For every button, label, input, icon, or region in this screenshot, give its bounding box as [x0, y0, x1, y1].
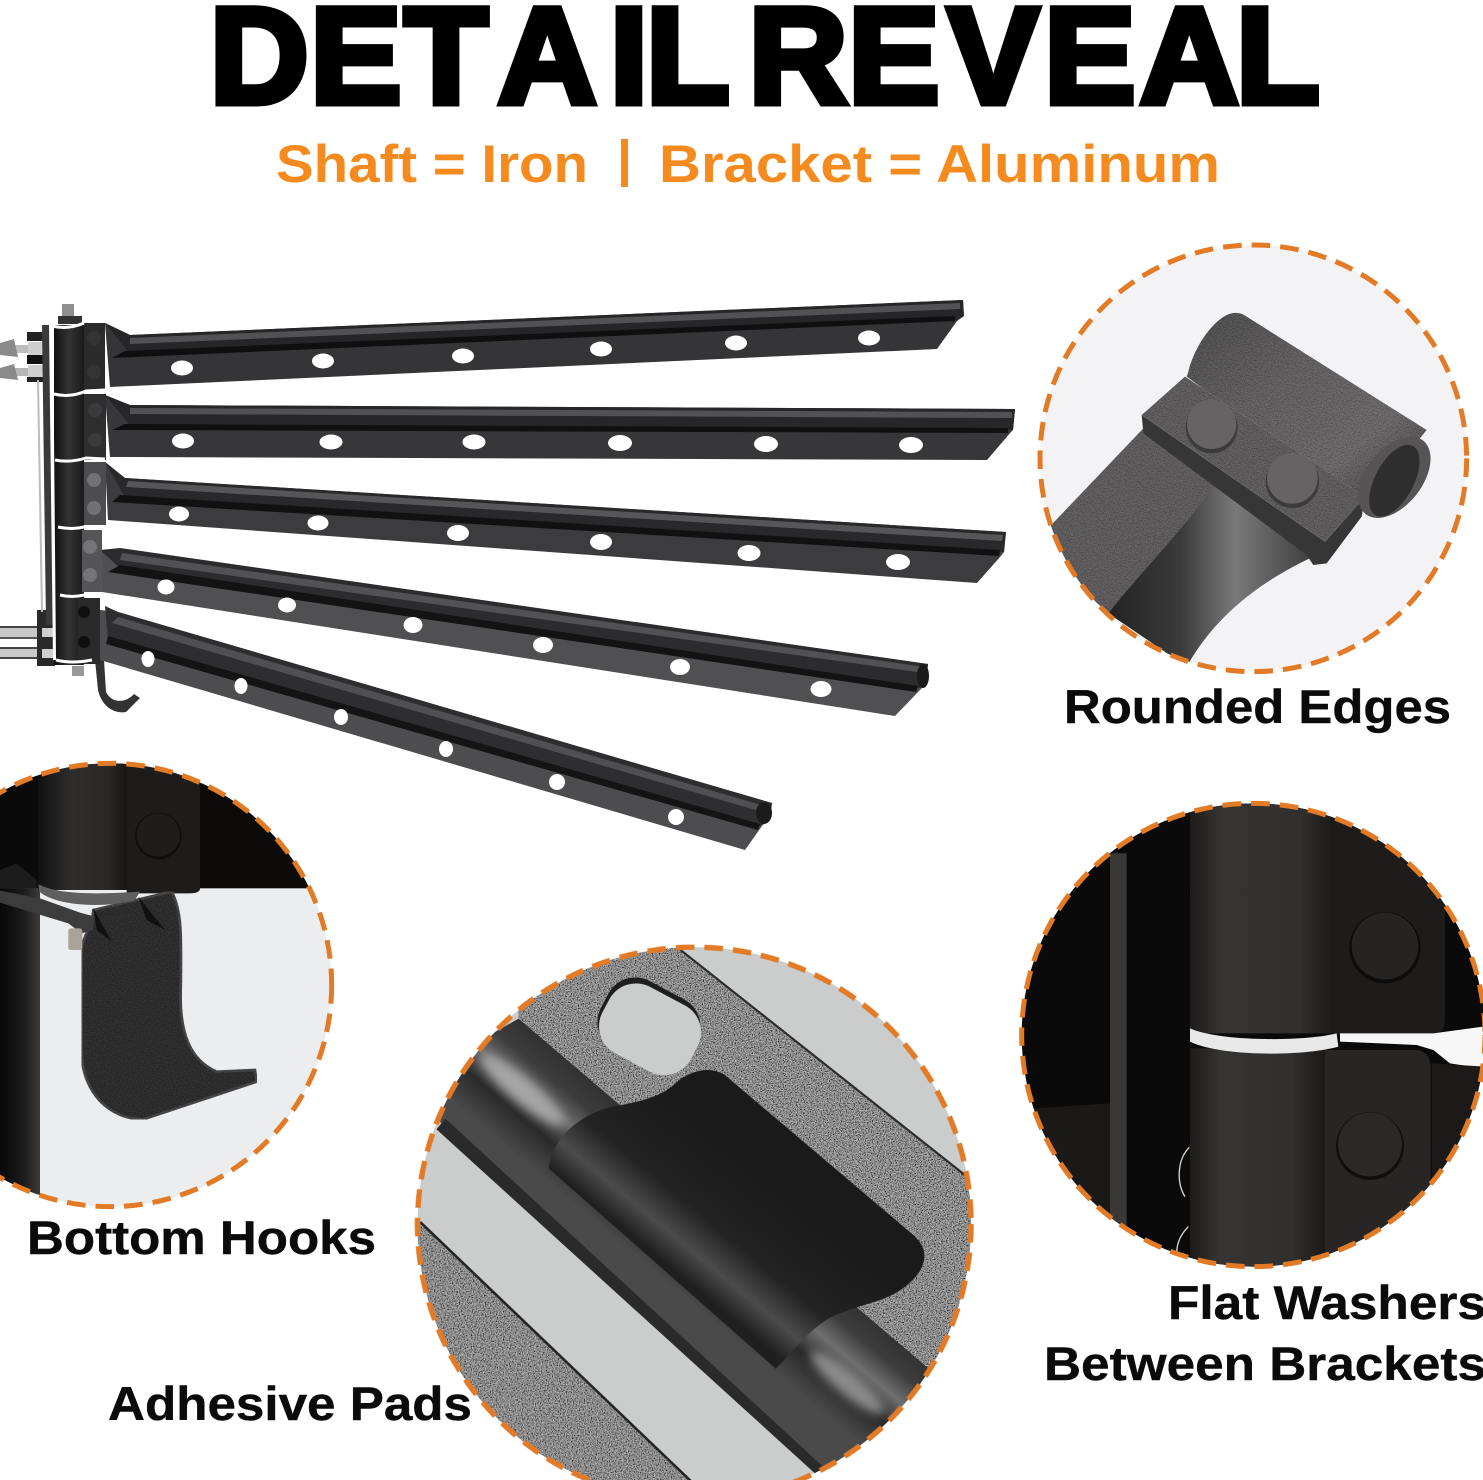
- nylon washer: [1190, 1028, 1338, 1054]
- hook small: [95, 660, 140, 712]
- product: swing arm rack: [0, 300, 1015, 850]
- rod: [436, 1019, 933, 1479]
- detail circle: rounded edges: [1040, 245, 1467, 672]
- upper metal plate: [518, 948, 972, 1368]
- label: bottom hooks: Bottom Hooks: [27, 1211, 376, 1264]
- upper rivet: [1349, 912, 1421, 983]
- label: adhesive pads: Adhesive Pads: [108, 1377, 472, 1430]
- back plate: [42, 325, 55, 625]
- lower left bracket: [1034, 1104, 1110, 1214]
- top plate: [1142, 377, 1365, 542]
- adhesive pad: [549, 1070, 924, 1369]
- arm 1: [105, 300, 964, 387]
- wall bolts top: [0, 332, 49, 382]
- detail circle: flat washers: [1022, 800, 1483, 1275]
- hook: [82, 892, 257, 1119]
- subtitle: materials: Bracket = Aluminum: [659, 135, 1220, 194]
- arm 3: [105, 462, 1006, 583]
- lower plate: [1325, 1050, 1431, 1267]
- lower plate: [1043, 428, 1220, 613]
- detail circle: adhesive pads: [411, 940, 979, 1480]
- right lower arm: [1432, 1064, 1480, 1178]
- lower rivet: [1336, 1112, 1404, 1180]
- barrel end and bore: [1358, 437, 1431, 518]
- knurled nut: [68, 928, 82, 950]
- upper plate: [1335, 813, 1445, 1035]
- subtitle: materials: Shaft = Iron: [276, 135, 588, 194]
- dark top band: [0, 763, 308, 888]
- thin back line: [37, 380, 43, 612]
- left arm: [0, 891, 95, 933]
- rivet one: [1186, 400, 1238, 453]
- upper tube: [1190, 800, 1337, 1033]
- white washers: [52, 323, 105, 662]
- label: flat washers: Flat Washers: [1168, 1276, 1483, 1329]
- bracket plates: [78, 323, 106, 664]
- formed tube: [1108, 485, 1313, 667]
- rivet two: [1266, 453, 1319, 508]
- slot hole: [597, 977, 701, 1076]
- subtitle: materials: [276, 135, 1220, 194]
- vertical shaft: [54, 325, 84, 665]
- arm 5: [100, 606, 772, 850]
- wall bolts bottom: [0, 610, 55, 666]
- pins: [58, 304, 84, 676]
- washer: [38, 884, 140, 905]
- side rail: [1110, 853, 1127, 1237]
- rivet: [135, 813, 182, 859]
- label: flat washers: Between Brackets: [1044, 1337, 1483, 1390]
- rib marks: [93, 908, 112, 942]
- arm 4: [100, 548, 929, 716]
- lower metal plate: [418, 1222, 688, 1480]
- detail circle: bottom hooks: [0, 760, 337, 1208]
- label: flat washers: [1044, 1276, 1483, 1390]
- side plate: [127, 760, 200, 893]
- lower tube: [1190, 1048, 1327, 1275]
- label: rounded edges: Rounded Edges: [1064, 680, 1451, 733]
- rod highlights: [473, 1046, 890, 1421]
- arm 2: [105, 395, 1015, 460]
- white frame line: [49, 324, 56, 660]
- under plate: [1142, 415, 1365, 565]
- white gap: [1340, 1027, 1483, 1068]
- small arcs: [1177, 1147, 1189, 1253]
- cylinder barrel: [1187, 313, 1427, 507]
- upper shaft: [38, 760, 130, 890]
